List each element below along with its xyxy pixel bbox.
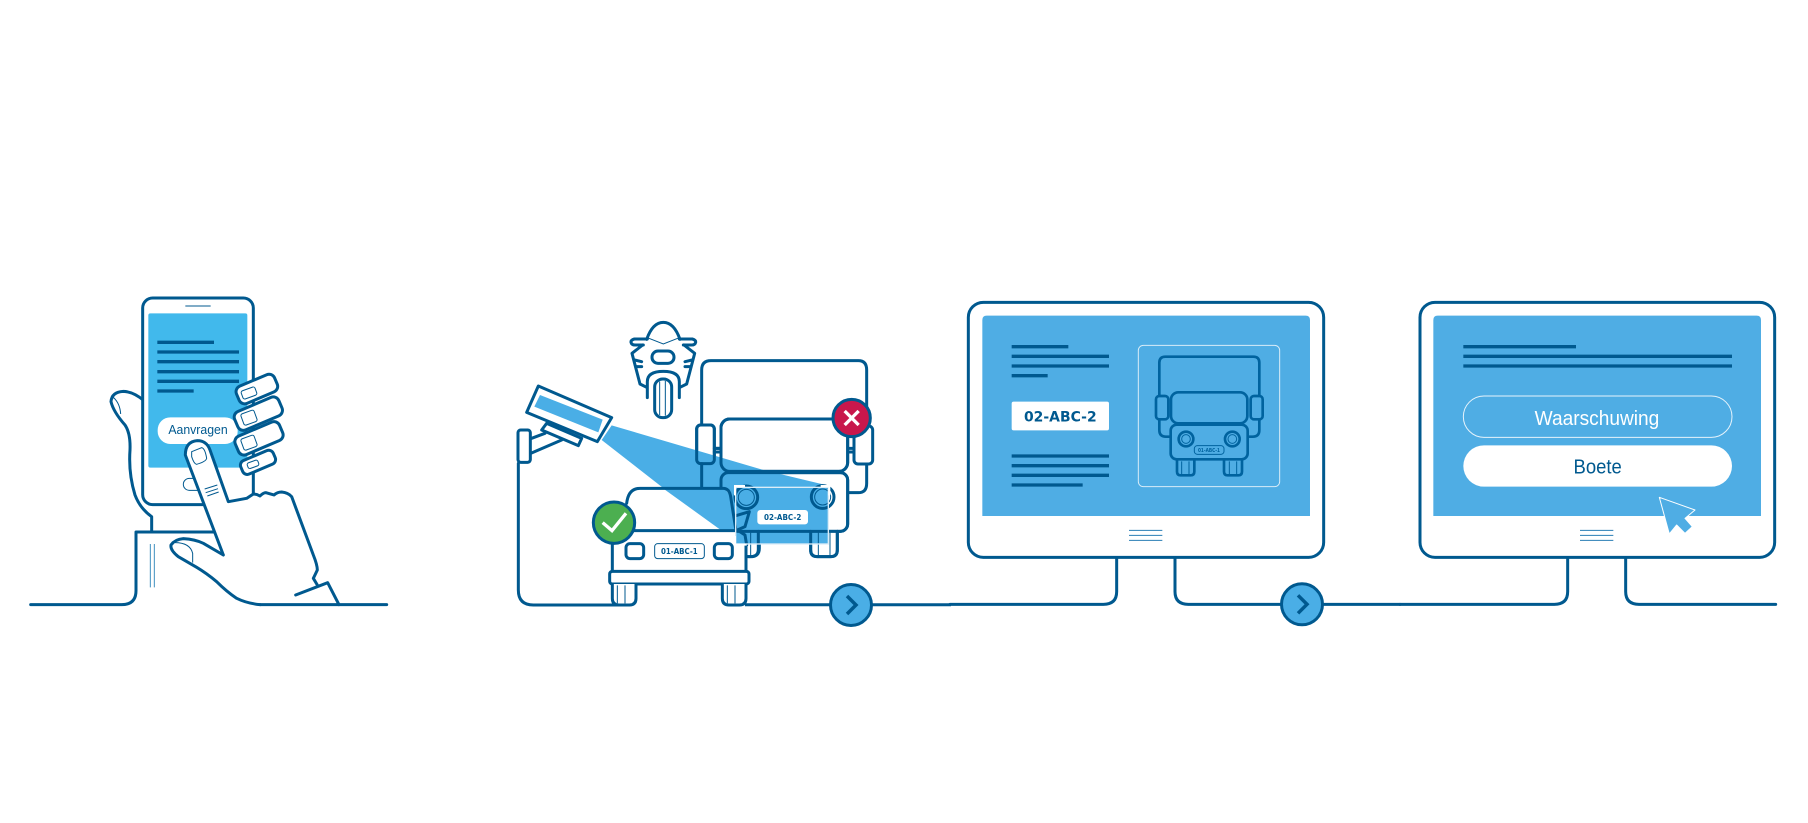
phone home button (183, 478, 210, 490)
panel: first monitor (950, 302, 1400, 604)
front car (610, 487, 749, 605)
baseline right part (260, 600, 387, 609)
icon: red cross (833, 399, 870, 437)
monitor frame (1420, 302, 1775, 557)
connecting line to first monitor (745, 603, 951, 606)
monitor menu lines (1129, 530, 1162, 540)
monitor stand (950, 557, 1400, 604)
camera and pole (518, 386, 629, 605)
button: Aanvragen (158, 417, 238, 444)
cursor (1659, 497, 1695, 534)
licence plate scanned: 02-ABC-2 (764, 513, 801, 522)
licence plate front car: 01-ABC-1 (661, 547, 698, 556)
phone body (143, 298, 253, 505)
button: Boete: Boete (1573, 457, 1622, 479)
phone screen (148, 313, 247, 468)
truck lines over beam (697, 419, 848, 557)
monitor stand (1400, 557, 1776, 604)
phone text lines (157, 342, 239, 391)
licence plate: 02-ABC-2 (1024, 409, 1097, 425)
sleeve (31, 532, 217, 605)
monitor frame (968, 302, 1324, 557)
finger nail and creases (175, 448, 219, 563)
arrow button 2 (1282, 584, 1322, 625)
fingers holding the phone (232, 372, 285, 476)
icon: green check (593, 502, 635, 543)
truck behind (697, 361, 873, 557)
truck icon (1156, 357, 1263, 475)
phone speaker (185, 304, 211, 307)
licence plate scanned (757, 510, 808, 524)
text lines (1463, 347, 1732, 366)
motorcycle (631, 322, 696, 418)
arrow button 1 (830, 584, 872, 626)
pointing hand (171, 441, 339, 605)
panel: camera and vehicles (518, 322, 873, 605)
truck photo frame (1138, 345, 1280, 487)
monitor screen (982, 316, 1310, 516)
monitor menu lines (1580, 530, 1613, 540)
text lines top (1012, 347, 1109, 376)
monitor screen (1433, 316, 1761, 516)
left hand behind phone (111, 391, 152, 532)
truck plate: 01-ABC-1 (1198, 448, 1220, 454)
button: Boete (1463, 445, 1732, 487)
button: Waarschuwing (1463, 396, 1732, 437)
camera beam (602, 425, 828, 544)
panel: second monitor (1400, 302, 1776, 604)
button: Aanvragen: Aanvragen (168, 422, 228, 437)
button: Waarschuwing: Waarschuwing (1535, 408, 1659, 430)
text lines bottom (1012, 456, 1109, 485)
licence plate (1012, 402, 1109, 430)
scan frame (735, 486, 829, 545)
panel: phone application (31, 298, 387, 605)
